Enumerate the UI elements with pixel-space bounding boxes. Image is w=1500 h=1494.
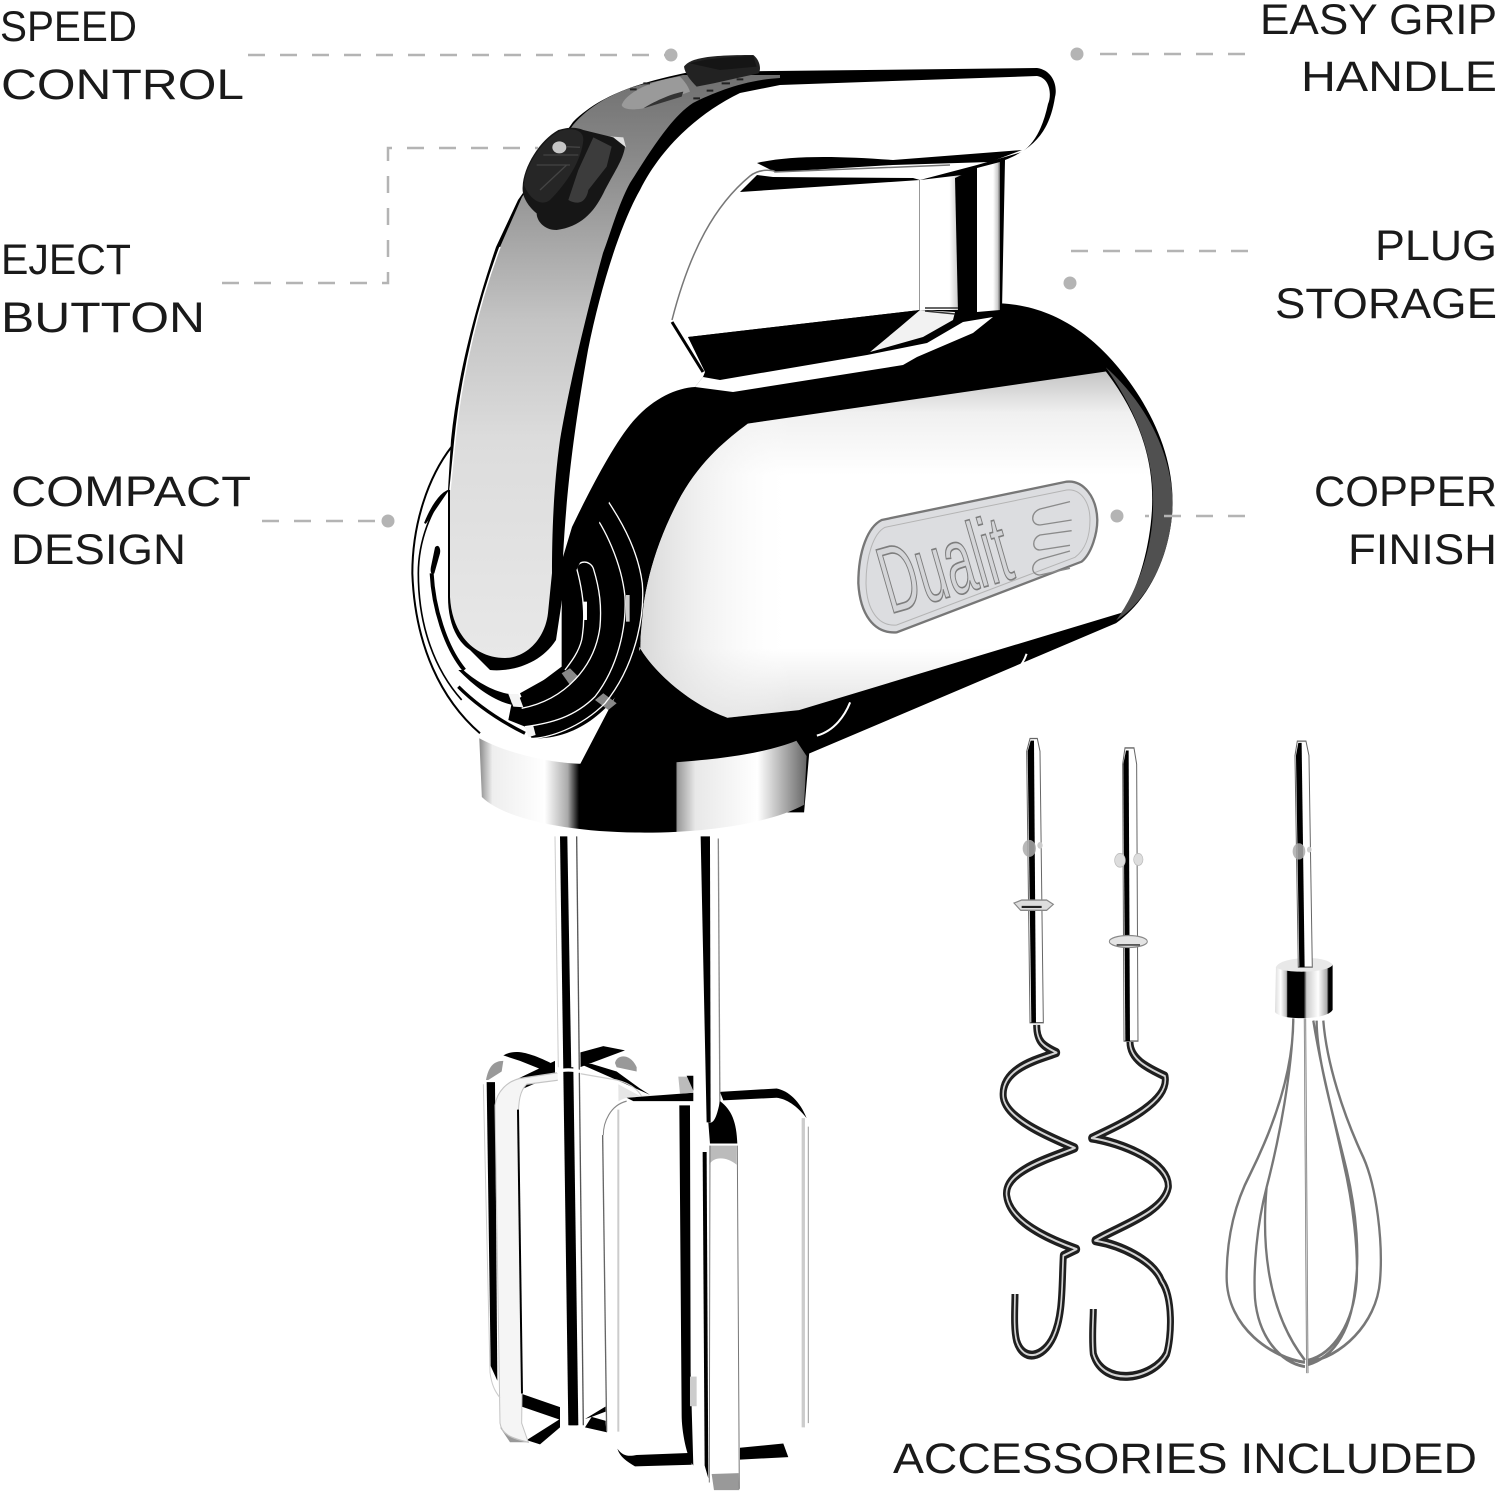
leader: compact design: [262, 514, 394, 528]
label: compact design: DESIGN: [11, 526, 186, 574]
dough hooks and whisk: [1003, 739, 1381, 1376]
lower flange chrome: [870, 310, 955, 352]
post base lines: [925, 308, 958, 314]
leader: easy grip: [1070, 48, 1245, 60]
leader: eject button: [222, 148, 538, 283]
label: plug storage: STORAGE: [1275, 280, 1497, 328]
face left shading: [640, 371, 1152, 718]
lower black window: [688, 310, 920, 375]
lower chrome strip: [695, 317, 993, 392]
right beater: [603, 830, 808, 1490]
label: eject button: EJECT: [1, 236, 131, 284]
arm left highlight: [450, 247, 500, 490]
label: speed control: CONTROL: [1, 61, 244, 109]
leader: copper finish: [1110, 510, 1245, 522]
label: accessories included: ACCESSORIES INCLUDED: [893, 1435, 1477, 1483]
rear vented housing: [412, 447, 643, 742]
leader: speed control: [248, 48, 678, 62]
top speed dial: [684, 55, 760, 87]
label: speed control: SPEED: [0, 3, 137, 51]
label: eject button: [1, 236, 205, 342]
label: copper finish: FINISH: [1348, 526, 1497, 574]
balloon whisk: [1227, 741, 1381, 1373]
body silhouette: [574, 303, 1173, 812]
label: compact design: COMPACT: [11, 468, 251, 516]
outer post: [977, 162, 1000, 312]
leader: plug storage: [1064, 251, 1248, 290]
controls: [523, 55, 760, 230]
black post slit: [955, 168, 977, 312]
base collar: [479, 738, 807, 833]
black upper sliver: [740, 175, 920, 192]
reflections on lower body: [817, 654, 1027, 736]
label: copper finish: [1314, 468, 1497, 574]
speed slot: [622, 77, 743, 109]
window frame rim: [672, 165, 950, 320]
textured arm panel with control deck: [450, 75, 780, 658]
handle: [448, 68, 1056, 670]
label: compact design: [11, 468, 251, 574]
dark end cap rim: [1106, 367, 1173, 621]
logo badge: Dualit: [867, 496, 1022, 634]
black band below flange: [720, 315, 1000, 380]
label: copper finish: COPPER: [1314, 468, 1497, 516]
label: speed control: [0, 3, 244, 109]
label: easy grip handle: HANDLE: [1301, 53, 1497, 101]
label: plug storage: [1275, 222, 1497, 328]
handle underside shadow: [757, 150, 1022, 172]
left shaft: [555, 830, 584, 1425]
polished side face: [640, 371, 1152, 718]
left beater back: [483, 1046, 660, 1444]
dough hook left: [1003, 739, 1077, 1355]
beaters: [483, 830, 808, 1490]
mixer body: [479, 303, 1173, 833]
handle silhouette: [448, 68, 1056, 670]
opening edge: [919, 180, 921, 310]
label: plug storage: PLUG: [1375, 222, 1497, 270]
inner post: [920, 175, 962, 310]
dough hook right: [1092, 748, 1170, 1376]
corner outline: [672, 322, 703, 372]
chrome handle: [563, 76, 1050, 557]
label: easy grip handle: [1260, 0, 1497, 101]
eject button knob: [523, 128, 626, 230]
label: eject button: BUTTON: [1, 294, 205, 342]
